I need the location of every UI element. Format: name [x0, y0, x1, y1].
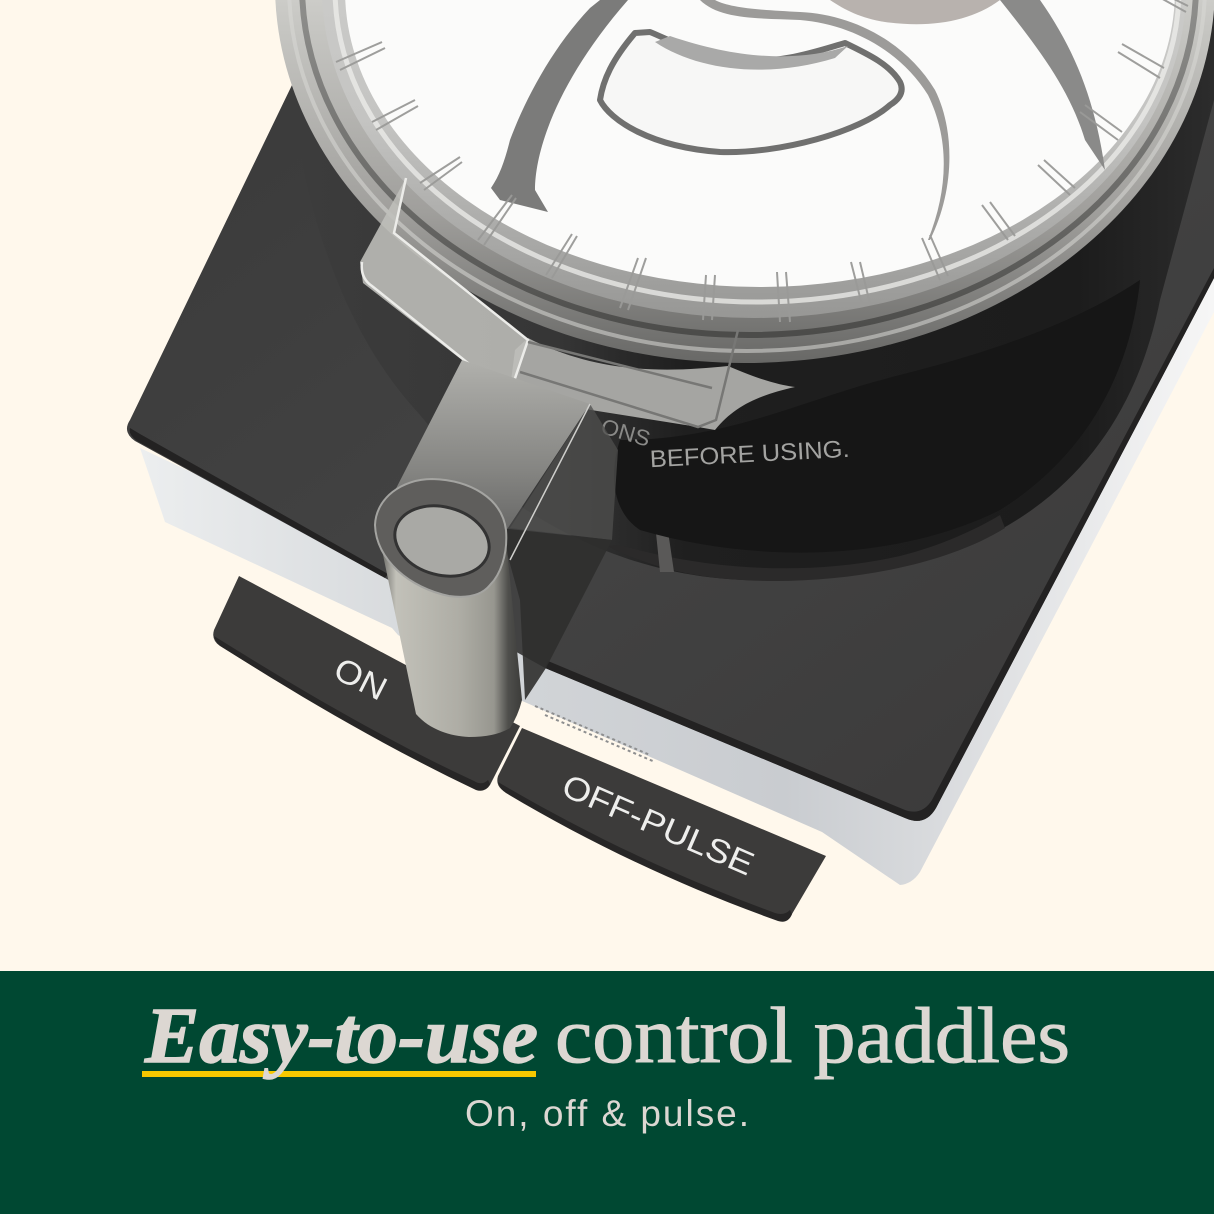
lid outer ring — [275, 0, 1214, 363]
blade top shadow — [700, 0, 949, 240]
food processor illustration — [127, 0, 1214, 922]
translucent right side — [510, 404, 618, 540]
embossed text on base side — [535, 706, 655, 762]
embossed warning text: BEFORE USING. — [649, 436, 850, 473]
lid ring contour lines — [289, 0, 1205, 351]
paddle: on — [213, 576, 520, 791]
handle outline — [520, 330, 738, 427]
chute flap — [386, 360, 618, 700]
lower flap — [500, 528, 612, 700]
tube body — [382, 540, 522, 737]
bowl foot rim — [608, 515, 1005, 581]
lid inner channel — [322, 0, 1186, 318]
green caption band — [0, 971, 1214, 1214]
paddle label: on: ON — [328, 650, 393, 707]
tube opening — [387, 496, 497, 586]
blade outline — [600, 32, 902, 152]
lid inner highlight — [335, 0, 1179, 302]
blade hub reflection — [830, 0, 1000, 24]
paddle: off-pulse — [497, 728, 826, 922]
handle left tab — [360, 178, 528, 397]
paddle label: off-pulse: OFF-PULSE — [557, 767, 760, 882]
base top — [127, 0, 1214, 821]
headline: Easy-to-use — [144, 993, 538, 1080]
handle lower band — [509, 338, 795, 430]
blade inner shadow — [655, 36, 848, 70]
dark reflection band: left — [491, 0, 628, 212]
blade reflection — [491, 0, 1105, 240]
bowl speckled black area — [614, 280, 1140, 553]
headline continuation: control paddles — [555, 993, 1070, 1080]
chute tube — [375, 479, 522, 737]
bowl lug — [656, 531, 674, 572]
subheading: On, off & pulse. — [465, 1093, 749, 1134]
highlight underline — [142, 1071, 536, 1077]
base front edge — [130, 268, 1214, 821]
embossed warning text fragment: ONS — [598, 414, 653, 452]
lid ticks — [336, 0, 1188, 322]
lid inner clear window — [345, 0, 1175, 287]
dark reflection band: right — [1000, 0, 1105, 170]
lid handle — [360, 178, 795, 430]
tube top ring — [375, 479, 506, 597]
bowl — [300, 0, 1214, 581]
translucent chute body — [386, 360, 590, 540]
cream background — [0, 0, 1214, 971]
base side panel — [140, 240, 1214, 885]
